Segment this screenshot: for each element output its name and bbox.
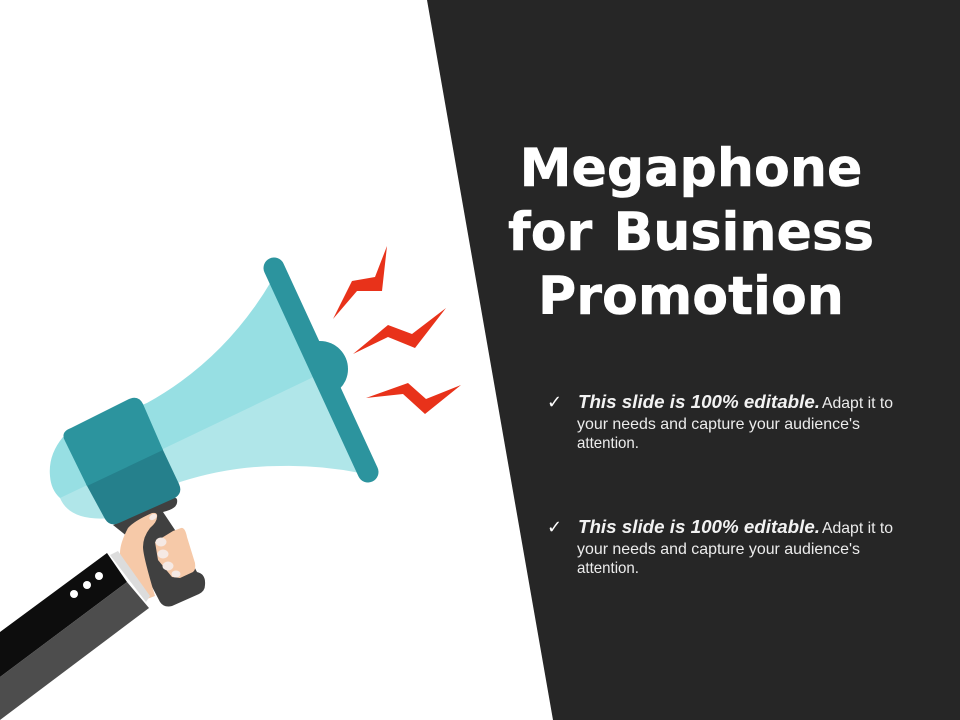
shirt cuff bbox=[110, 551, 150, 602]
bullet 2: Adapt it to bbox=[822, 520, 893, 537]
bullet 1 bbox=[547, 392, 893, 452]
megaphone back dome bbox=[292, 341, 348, 397]
arm sleeve bbox=[0, 553, 149, 720]
icon: sound bolts bbox=[333, 246, 461, 414]
bullet 1: ✓ bbox=[547, 392, 562, 413]
megaphone collar bbox=[63, 398, 180, 524]
title bbox=[508, 139, 874, 327]
bullet 1: Adapt it to bbox=[822, 395, 893, 412]
icon: megaphone with hand bbox=[0, 268, 368, 720]
title: Megaphone bbox=[520, 139, 862, 199]
megaphone rim bbox=[274, 268, 368, 472]
bullet 1: This slide is 100% editable. bbox=[578, 392, 820, 412]
bullet 2: This slide is 100% editable. bbox=[578, 517, 820, 537]
hand bbox=[120, 513, 195, 599]
dark panel bbox=[427, 0, 960, 720]
title: for Business bbox=[508, 203, 874, 263]
title: Promotion bbox=[538, 267, 844, 327]
megaphone bell bbox=[50, 280, 360, 519]
bullet 2: attention. bbox=[577, 560, 639, 577]
bullet 2: your needs and capture your audience's bbox=[577, 541, 860, 558]
bullet 1: attention. bbox=[577, 435, 639, 452]
megaphone handle bbox=[113, 498, 205, 606]
bullet 1: your needs and capture your audience's bbox=[577, 416, 860, 433]
bullet 2 bbox=[547, 517, 893, 577]
bullet 2: ✓ bbox=[547, 517, 562, 538]
